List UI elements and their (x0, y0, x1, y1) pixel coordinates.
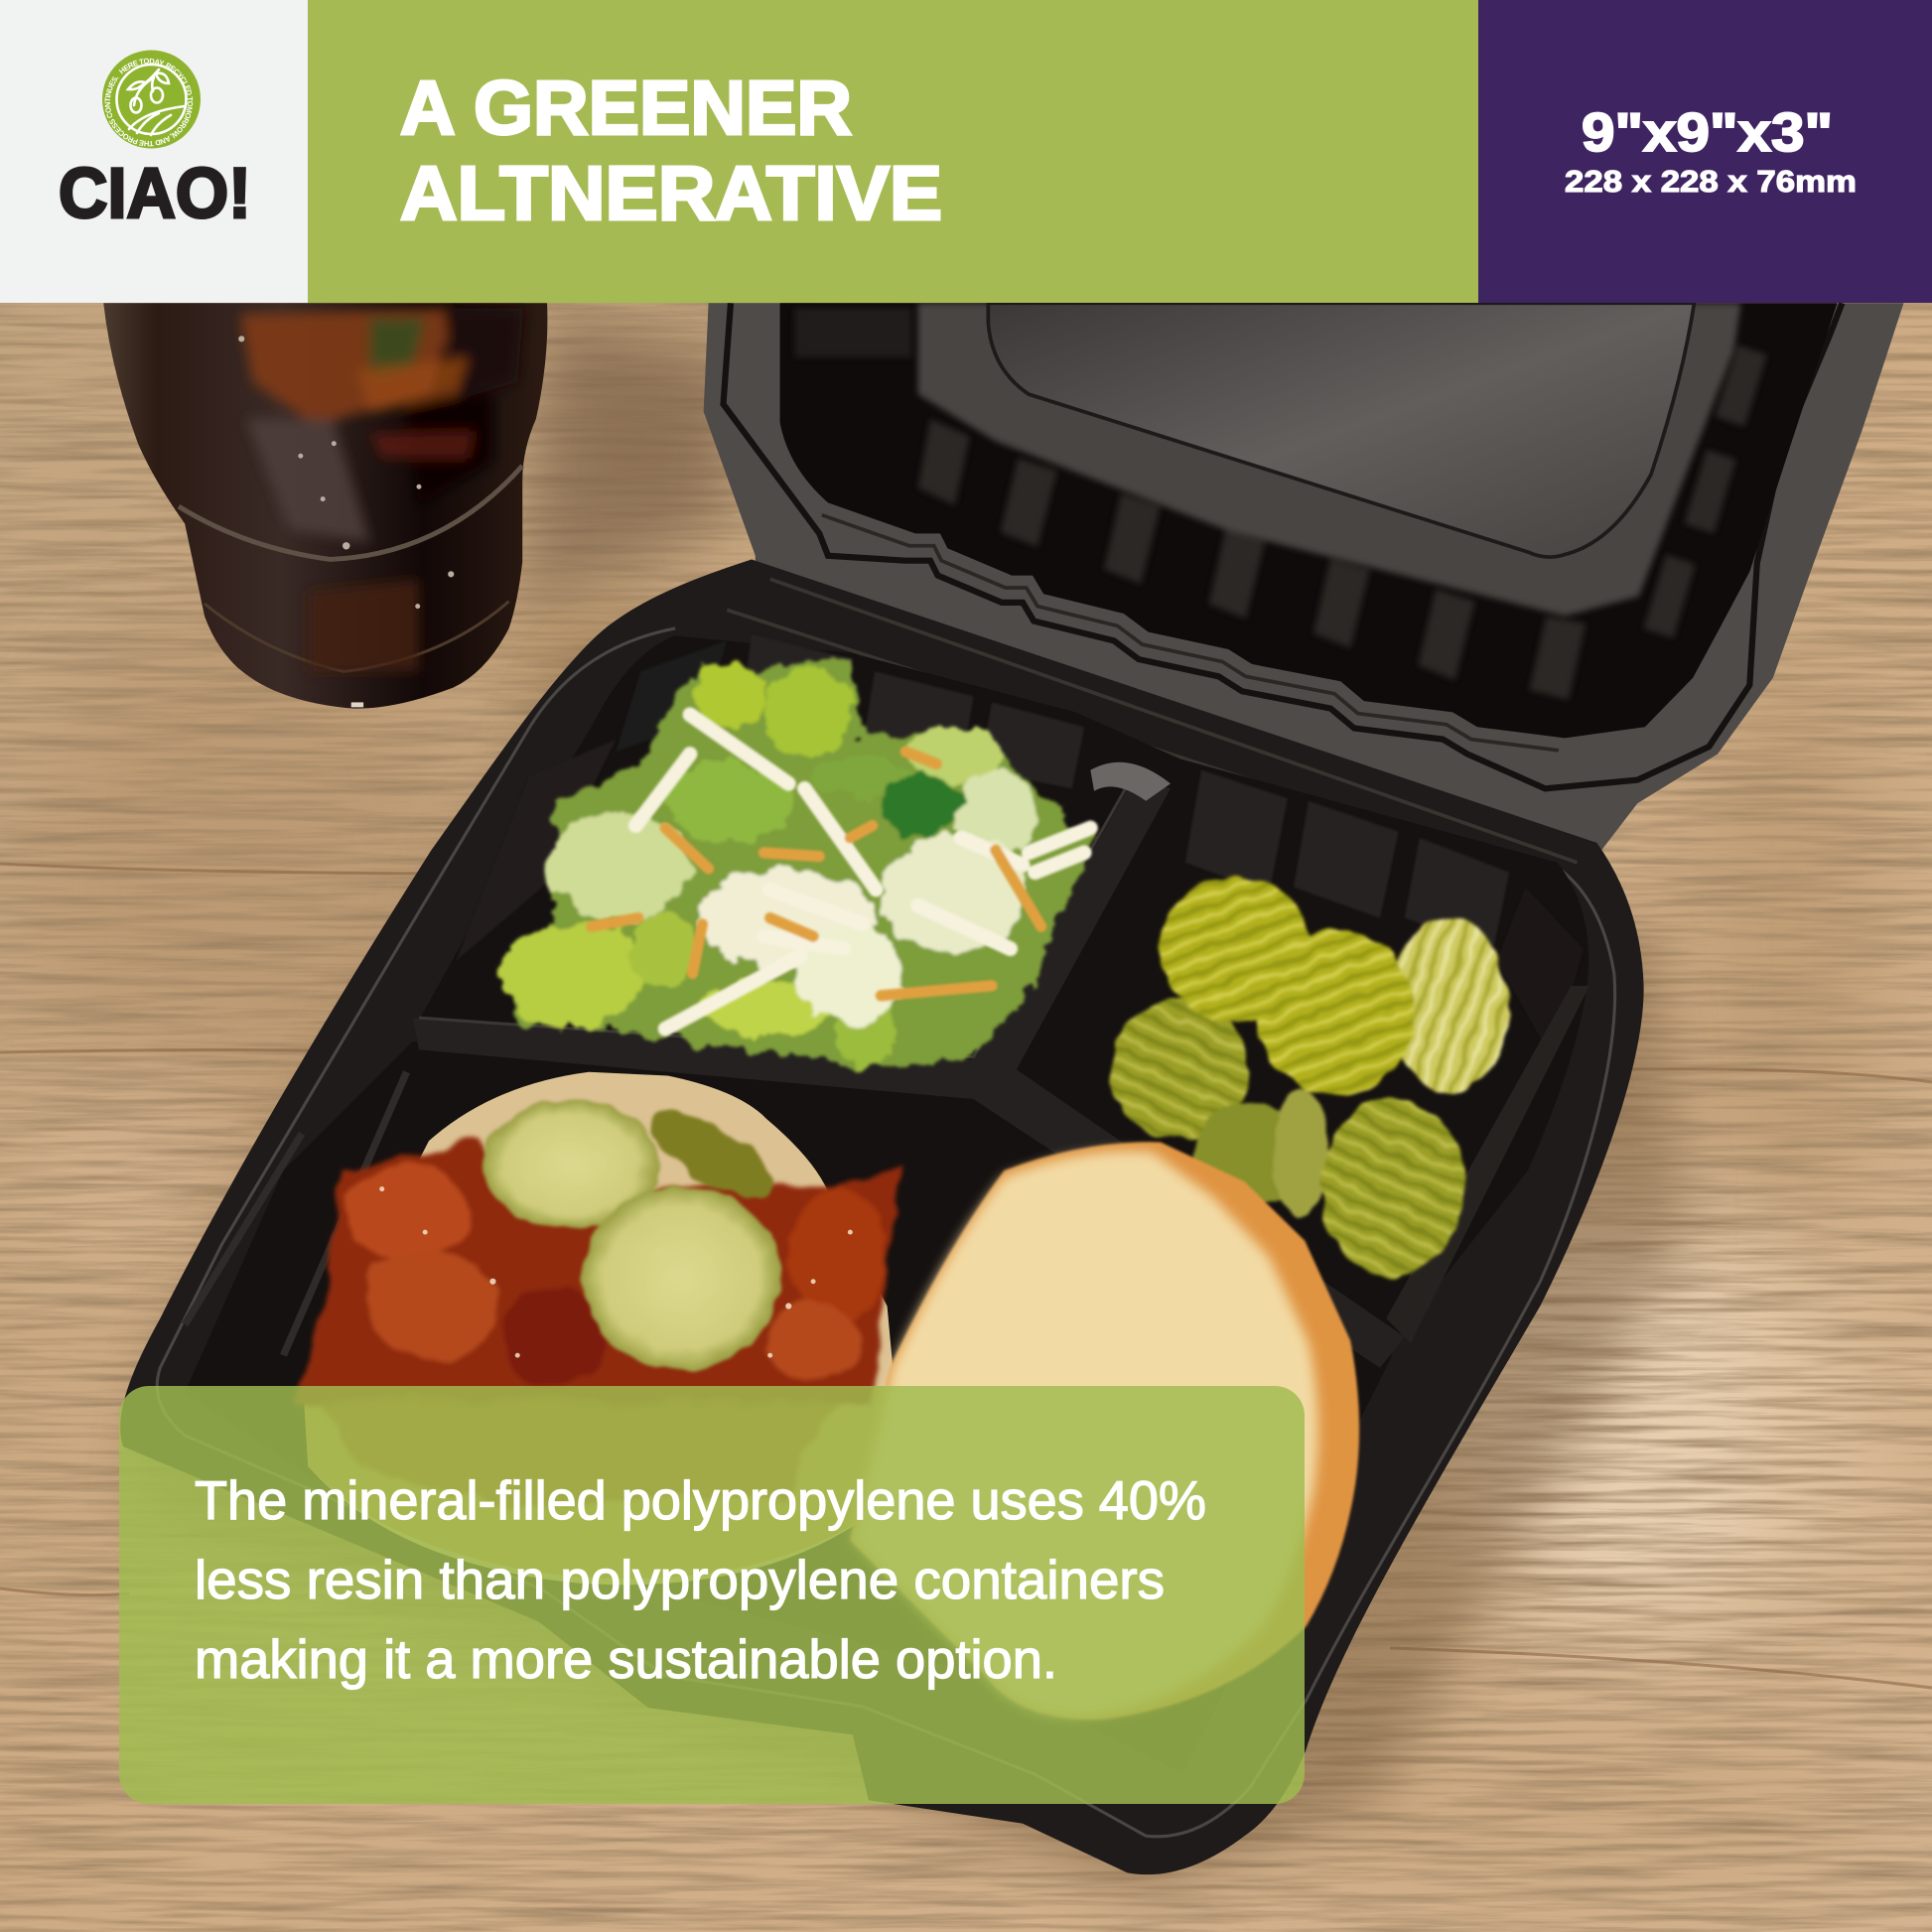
tray hinge ridges (727, 579, 1578, 883)
header: title panel (308, 0, 1478, 303)
icon: recycling olive badge: HERE TODAY, RECYCLED TOMORROW, AND THE PROCESS CONTINUES. (105, 58, 193, 147)
open container lid (704, 303, 1903, 857)
lid well ribs (794, 308, 1767, 700)
compartment dividers (413, 778, 1405, 1368)
lid deep well (780, 303, 1837, 738)
compartment wall panels (456, 634, 1584, 1059)
lid plateau (918, 303, 1741, 617)
callout text: making it a more sustainable option. (195, 1628, 1057, 1690)
food: sandwich with sauced meat (296, 1072, 903, 1585)
header: dimensions panel (1478, 0, 1932, 303)
container tray (120, 559, 1644, 1874)
callout panel (119, 1386, 1305, 1804)
container shadow on table (136, 640, 1688, 1897)
dimensions in inches: 9"x9"x3" (1582, 101, 1833, 163)
header: logo panel (0, 0, 308, 336)
salad cheese and carrot shreds (592, 715, 1090, 1029)
lid recessed centre panel (988, 303, 1694, 557)
title: ALTNERATIVE (400, 151, 942, 236)
cup of cola (103, 303, 740, 709)
lid channel (724, 303, 1842, 788)
title: A GREENER (400, 66, 852, 151)
tray interior (419, 635, 1588, 1343)
logo wordmark: CIAO! (59, 155, 251, 233)
food: bread bun half (850, 1142, 1359, 1720)
dimensions in millimetres: 228 x 228 x 76mm (1565, 164, 1857, 199)
food: pickles (1110, 876, 1508, 1277)
callout text: The mineral-filled polypropylene uses 40% (195, 1469, 1206, 1531)
left compartment walls (185, 1072, 407, 1355)
food: salad (502, 653, 1097, 1067)
callout text: less resin than polypropylene containers (195, 1549, 1165, 1610)
